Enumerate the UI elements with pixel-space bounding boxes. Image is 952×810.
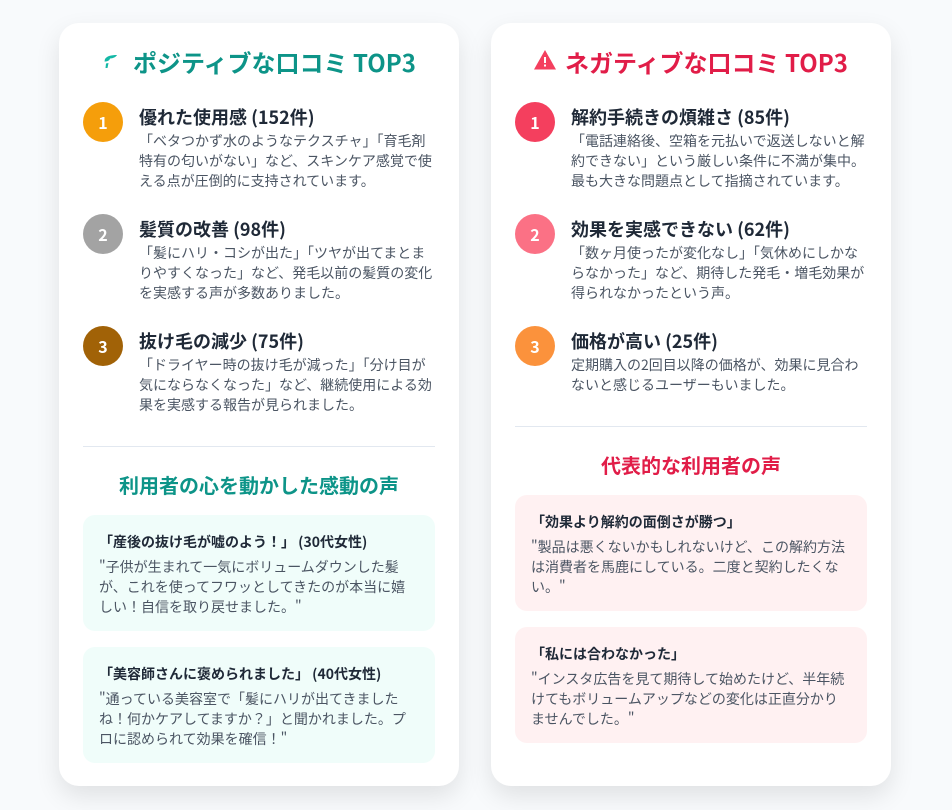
item 1: cancellation: 最も大きな問題点として指摘されています。 bbox=[571, 171, 849, 191]
badge 2: 2 bbox=[530, 222, 540, 246]
item 3: less hair loss: 気にならなくなった」など、継続使用による効 bbox=[139, 375, 432, 395]
item 1: usability: 「ベタつかず水のようなテクスチャ」「育毛剤 bbox=[139, 131, 425, 151]
quote card 1: しい！自信を取り戻せました。" bbox=[99, 597, 302, 617]
item 1: cancellation: 解約手続きの煩雑さ (85件) bbox=[571, 104, 790, 130]
item 2: no effect: らなかった」など、期待した発毛・増毛効果が bbox=[571, 263, 864, 283]
item 2: hair quality: 髪質の改善 (98件) bbox=[139, 216, 286, 242]
quote card 2: "通っている美容室で「髪にハリが出てきました bbox=[99, 689, 399, 709]
quote card 1: "製品は悪くないかもしれないけど、この解約方法 bbox=[531, 537, 845, 557]
icon: warning triangle bbox=[534, 50, 556, 70]
item 2: hair quality bbox=[139, 216, 432, 303]
item 2: no effect: 得られなかったという声。 bbox=[571, 283, 739, 303]
badge 1 bbox=[83, 102, 123, 142]
quote card 1: 「効果より解約の面倒さが勝つ」 bbox=[531, 512, 741, 532]
title: negative: ネガティブな口コミ TOP3 bbox=[565, 44, 848, 79]
subheading: negative voices: 代表的な利用者の声 bbox=[601, 450, 781, 479]
item 1: cancellation bbox=[571, 104, 865, 191]
quote card 1 bbox=[83, 515, 435, 631]
item 3: price: 定期購入の2回目以降の価格が、効果に見合わ bbox=[571, 355, 858, 375]
badge 1 bbox=[515, 102, 555, 142]
badge 2: 2 bbox=[98, 222, 108, 246]
item 1: cancellation: 「電話連絡後、空箱を元払いで返送しないと解 bbox=[571, 131, 865, 151]
badge 3: 3 bbox=[98, 334, 108, 358]
item 2: hair quality: を実感する声が多数ありました。 bbox=[139, 283, 349, 303]
item 1: usability: える点が圧倒的に支持されています。 bbox=[139, 171, 375, 191]
item 3: price: ないと感じるユーザーもいました。 bbox=[571, 375, 794, 395]
item 2: no effect bbox=[571, 216, 864, 303]
quote card 2: ね！何かケアしてますか？」と聞かれました。プ bbox=[99, 709, 406, 729]
item 1: usability bbox=[139, 104, 432, 191]
panel: negative reviews bbox=[491, 23, 891, 786]
icon: leaf bbox=[104, 55, 117, 68]
quote card 2: けてもボリュームアップなどの変化は正直分かり bbox=[531, 689, 838, 709]
item 3: price bbox=[571, 328, 858, 395]
quote card 1: い。" bbox=[531, 577, 566, 597]
quote card 2: 「私には合わなかった」 bbox=[531, 644, 685, 664]
quote card 2: 「美容師さんに褒められました」 (40代女性) bbox=[99, 664, 381, 684]
item 1: usability: 特有の匂いがない」など、スキンケア感覚で使 bbox=[139, 151, 432, 171]
quote card 1: "子供が生まれて一気にボリュームダウンした髪 bbox=[99, 557, 399, 577]
item 2: hair quality: 「髪にハリ・コシが出た」「ツヤが出てまとま bbox=[139, 243, 425, 263]
subheading: positive voices: 利用者の心を動かした感動の声 bbox=[119, 470, 399, 499]
badge 3: 3 bbox=[530, 334, 540, 358]
item 3: less hair loss: 「ドライヤー時の抜け毛が減った」「分け目が bbox=[139, 355, 426, 375]
item 3: less hair loss bbox=[139, 328, 432, 415]
quote card 2: ロに認められて効果を確信！" bbox=[99, 729, 287, 749]
item 1: cancellation: 約できない」という厳しい条件に不満が集中。 bbox=[571, 151, 865, 171]
quote card 2: ませんでした。" bbox=[531, 709, 635, 729]
item 2: no effect: 「数ヶ月使ったが変化なし」「気休めにしかな bbox=[571, 243, 858, 263]
badge 2 bbox=[515, 214, 555, 254]
badge 3 bbox=[83, 326, 123, 366]
quote card 2 bbox=[83, 647, 435, 763]
quote card 2: "インスタ広告を見て期待して始めたけど、半年続 bbox=[531, 669, 844, 689]
badge 2 bbox=[83, 214, 123, 254]
badge 3 bbox=[515, 326, 555, 366]
item 1: usability: 優れた使用感 (152件) bbox=[139, 104, 315, 130]
item 3: price: 価格が高い (25件) bbox=[571, 328, 718, 354]
title: positive: ポジティブな口コミ TOP3 bbox=[133, 44, 416, 79]
badge 1: 1 bbox=[98, 110, 108, 134]
item 3: less hair loss: 抜け毛の減少 (75件) bbox=[139, 328, 304, 354]
quote card 1: が、これを使ってフワッとしてきたのが本当に嬉 bbox=[99, 577, 405, 597]
quote card 1: 「産後の抜け毛が嘘のよう！」 (30代女性) bbox=[99, 532, 367, 552]
panel: positive reviews bbox=[59, 23, 459, 786]
badge 1: 1 bbox=[530, 110, 540, 134]
item 2: no effect: 効果を実感できない (62件) bbox=[571, 216, 790, 242]
quote card 1: は消費者を馬鹿にしている。二度と契約したくな bbox=[531, 557, 839, 577]
quote card 1 bbox=[515, 495, 867, 611]
item 2: hair quality: りやすくなった」など、発毛以前の髪質の変化 bbox=[139, 263, 432, 283]
quote card 2 bbox=[515, 627, 867, 743]
item 3: less hair loss: 果を実感する報告が見られました。 bbox=[139, 395, 363, 415]
